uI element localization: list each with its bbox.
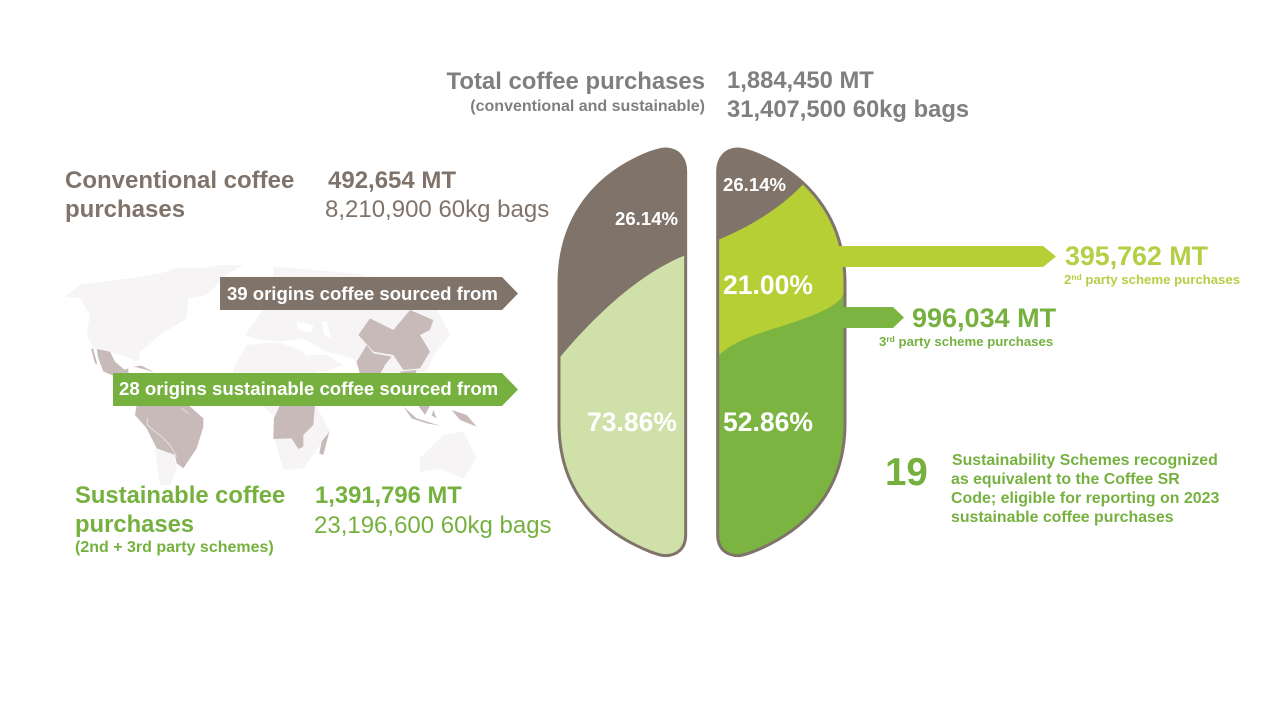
bean percentage labels: 26.14% bbox=[723, 174, 787, 195]
text: 19 sustainability schemes: Sustainability Schemes recognized bbox=[952, 452, 1218, 469]
arrow: 28 origins bbox=[113, 373, 518, 406]
heading: total coffee purchases: 31,407,500 60kg bags bbox=[727, 96, 969, 123]
heading: total coffee purchases: Total coffee purchases bbox=[447, 68, 705, 95]
text: 19 sustainability schemes bbox=[885, 451, 1219, 526]
text: 2nd party purchases: 395,762 MT bbox=[1065, 241, 1209, 271]
text: sustainable coffee purchases: (2nd + 3rd party schemes) bbox=[75, 539, 274, 556]
world map bbox=[65, 265, 477, 485]
text: conventional coffee purchases: 8,210,900 60kg bags bbox=[325, 196, 549, 223]
text: sustainable coffee purchases: Sustainable coffee bbox=[75, 482, 285, 509]
text: 19 sustainability schemes: sustainable coffee purchases bbox=[951, 509, 1174, 526]
arrow: 28 origins: 28 origins sustainable coffee sourced from bbox=[119, 378, 498, 399]
text: 3rd party purchases: 996,034 MT bbox=[912, 303, 1057, 333]
text: 3rd party purchases: 3 bbox=[879, 334, 886, 349]
text: 19 sustainability schemes: 19 bbox=[885, 451, 928, 494]
text: sustainable coffee purchases bbox=[75, 482, 552, 556]
text: 2nd party purchases bbox=[1064, 241, 1240, 287]
text: 3rd party purchases: party scheme purchases bbox=[895, 334, 1053, 349]
text: 2nd party purchases: 2 bbox=[1064, 272, 1071, 287]
text: 2nd party purchases: nd bbox=[1071, 272, 1082, 282]
text: conventional coffee purchases: Conventional coffee bbox=[65, 167, 294, 194]
text: conventional coffee purchases bbox=[65, 167, 549, 223]
arrow: 2nd party bbox=[830, 246, 1056, 267]
bean percentage labels: 52.86% bbox=[723, 407, 813, 437]
arrow: 39 origins: 39 origins coffee sourced from bbox=[227, 283, 498, 304]
text: sustainable coffee purchases: 1,391,796 MT bbox=[315, 482, 462, 509]
text: 2nd party purchases: party scheme purchases bbox=[1082, 272, 1240, 287]
arrow: 3rd party bbox=[835, 307, 904, 328]
bean percentage labels: 26.14% bbox=[615, 208, 679, 229]
arrow: 39 origins bbox=[220, 277, 518, 310]
text: conventional coffee purchases: purchases bbox=[65, 196, 185, 223]
heading: total coffee purchases: (conventional and sustainable) bbox=[470, 98, 705, 115]
heading: total coffee purchases: 1,884,450 MT bbox=[727, 67, 874, 94]
text: 3rd party purchases: rd bbox=[886, 334, 895, 344]
text: sustainable coffee purchases: 23,196,600 60kg bags bbox=[314, 512, 552, 539]
coffee bean left half bbox=[559, 149, 686, 556]
bean percentage labels: 21.00% bbox=[723, 270, 813, 300]
text: sustainable coffee purchases: purchases bbox=[75, 511, 194, 538]
text: 19 sustainability schemes: Code; eligible for reporting on 2023 bbox=[951, 490, 1219, 507]
heading: total coffee purchases bbox=[447, 67, 969, 123]
text: conventional coffee purchases: 492,654 MT bbox=[328, 167, 456, 194]
coffee bean right half bbox=[716, 148, 846, 558]
bean percentage labels: 73.86% bbox=[587, 407, 677, 437]
bean percentage labels bbox=[587, 174, 813, 437]
text: 19 sustainability schemes: as equivalent to the Coffee SR bbox=[951, 471, 1180, 488]
text: 3rd party purchases bbox=[879, 303, 1057, 349]
